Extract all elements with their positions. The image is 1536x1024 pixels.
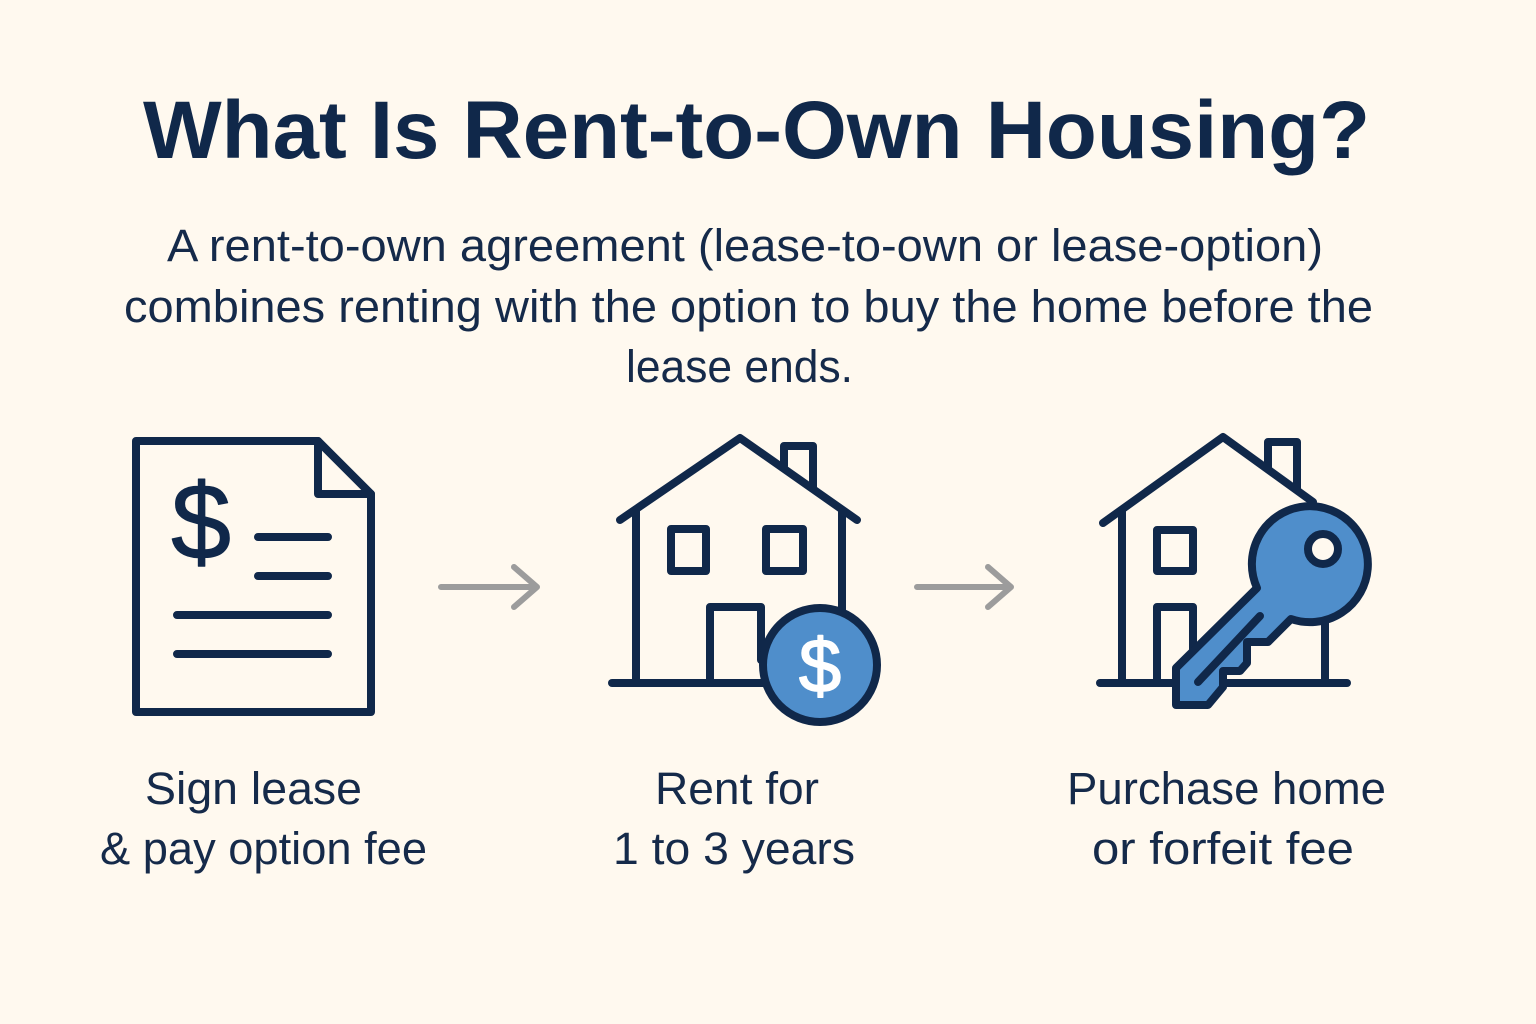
label: step 3: or forfeit fee — [1092, 823, 1354, 874]
icon: house with key — [1100, 437, 1368, 705]
description text block — [124, 220, 1373, 392]
label: step 2: 1 to 3 years — [613, 823, 855, 874]
label: step 3 — [1067, 763, 1386, 874]
label: step 3: Purchase home — [1067, 763, 1386, 814]
label: step 1: & pay option fee — [100, 823, 427, 874]
icon: lease document with dollar sign: $ — [171, 461, 231, 582]
icon: dollar coin — [763, 608, 877, 722]
description text block: A rent-to-own agreement (lease-to-own or lease-option) — [167, 220, 1323, 271]
arrow: lease to rent — [441, 567, 537, 607]
title: What Is Rent-to-Own Housing? — [143, 85, 1370, 176]
label: step 2: Rent for — [655, 763, 819, 814]
label: step 2 — [613, 763, 855, 874]
arrow: rent to purchase — [917, 567, 1011, 607]
label: step 1: Sign lease — [145, 763, 362, 814]
icon: lease document with dollar sign — [136, 441, 371, 712]
description text block: combines renting with the option to buy the home before the — [124, 281, 1373, 332]
description text block: lease ends. — [626, 341, 853, 392]
icon: house with dollar coin — [612, 438, 877, 722]
label: step 1 — [100, 763, 427, 874]
icon: key — [1176, 506, 1368, 705]
icon: dollar coin: $ — [799, 624, 841, 709]
